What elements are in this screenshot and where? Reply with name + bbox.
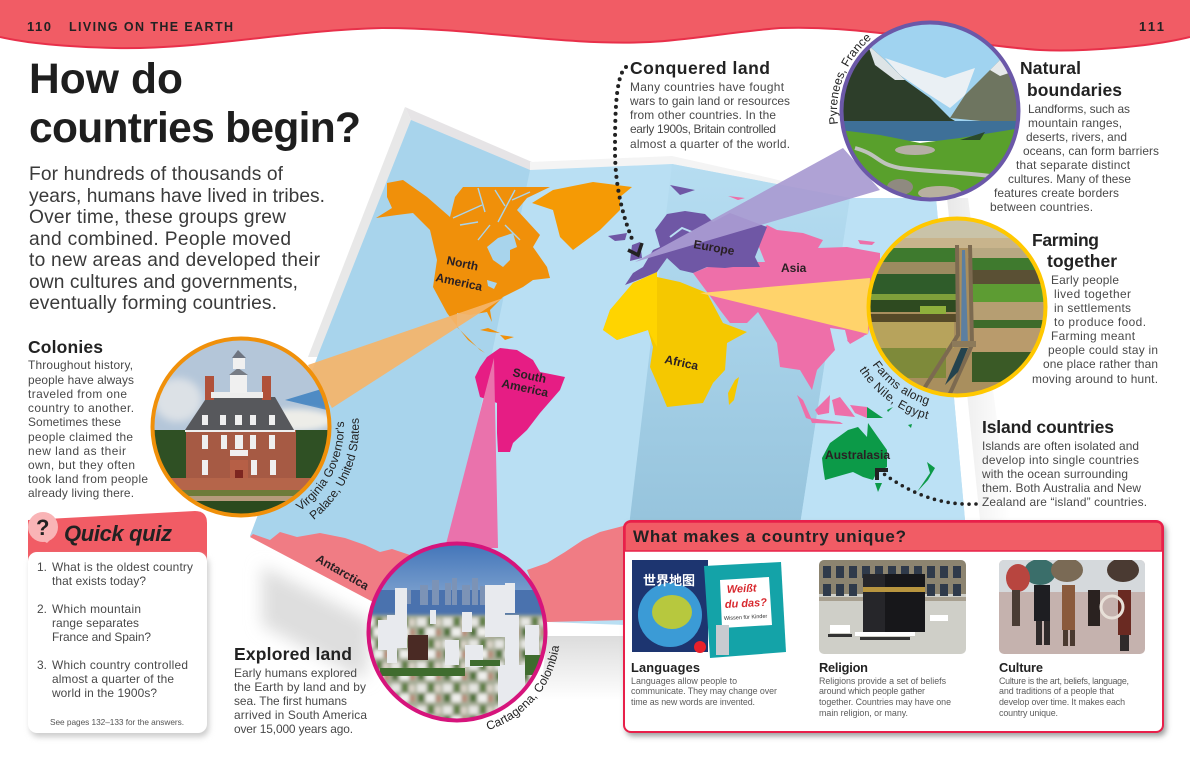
continent labels: Europe	[692, 237, 736, 258]
text block: Farming together: one place rather than	[1043, 357, 1158, 371]
intro text: to new areas and developed their	[29, 250, 321, 271]
world map	[250, 120, 965, 625]
continent labels: Asia	[781, 261, 807, 275]
intro text: eventually forming countries.	[29, 293, 277, 314]
header band	[0, 0, 1190, 50]
continent labels: South	[511, 365, 548, 386]
text block: Island countries: them. Both Australia and New	[982, 481, 1141, 495]
text block: Conquered land: wars to gain land or resources	[629, 94, 790, 108]
caption: Virginia Governor's Palace: Virginia Governor's	[295, 422, 344, 509]
image: language books	[632, 560, 786, 658]
text block: Colonies: Sometimes these	[28, 415, 121, 429]
arrow: dotted line to Britain	[615, 67, 642, 255]
continent: Antarctica	[250, 525, 627, 622]
quiz questions: What is the oldest country	[52, 560, 193, 574]
text block: Farming together	[1032, 230, 1158, 386]
beam: South America to Cartagena	[445, 358, 498, 548]
running head: LIVING ON THE EARTH	[69, 20, 233, 34]
text block: Colonies: country to another.	[28, 401, 134, 415]
text: Languages: Languages	[631, 660, 700, 675]
continent labels: America	[500, 376, 550, 400]
text block: Colonies: Throughout history,	[28, 358, 133, 372]
continent: Australasia	[822, 407, 935, 492]
intro text: For hundreds of thousands of	[29, 164, 284, 185]
panel header	[625, 522, 1162, 551]
continent labels	[314, 237, 890, 593]
intro text: and combined. People moved	[29, 229, 291, 250]
text block: Colonies: new land as their	[28, 444, 126, 458]
intro text: own cultures and governments,	[29, 272, 298, 293]
quiz questions: 2.	[37, 602, 47, 616]
continent labels: Australasia	[825, 448, 890, 462]
text block: Natural boundaries: boundaries	[1027, 80, 1122, 100]
text: Culture: develop over time. It makes each	[999, 697, 1125, 707]
text: Religion	[819, 660, 951, 718]
text block: Natural boundaries	[990, 58, 1159, 214]
icon: question bubble: ?	[36, 515, 49, 540]
quiz questions: range separates	[52, 616, 139, 630]
image: traditional dancers	[999, 558, 1145, 654]
text: Culture: country unique.	[999, 708, 1058, 718]
title: How do	[29, 56, 183, 103]
quiz questions: 1.	[37, 560, 47, 574]
continent labels: Africa	[663, 352, 700, 373]
quiz heading: Quick quiz	[64, 521, 172, 546]
continent: North America	[376, 180, 550, 353]
continent: Europe	[608, 185, 767, 285]
text block: Colonies: Colonies	[28, 337, 103, 357]
paper shadows	[262, 107, 1010, 700]
text block: Farming together: Farming meant	[1051, 329, 1136, 343]
page number right: 111	[1139, 19, 1164, 34]
intro text: Over time, these groups grew	[29, 207, 286, 228]
text block: Natural boundaries: mountain ranges,	[1028, 116, 1122, 130]
text block: Natural boundaries: deserts, rivers, and	[1026, 130, 1127, 144]
text block: Island countries: with the ocean surrounding	[981, 467, 1128, 481]
beam: North America to palace	[308, 298, 503, 408]
photo: Cartagena	[366, 542, 548, 722]
caption: Cartagena, Colombia: Cartagena, Colombia	[486, 646, 560, 730]
text block: Colonies: people claimed the	[28, 430, 133, 444]
quiz questions: Which country controlled	[52, 658, 188, 672]
text: Culture: Culture	[999, 660, 1043, 675]
text block: Colonies: own, but they often	[28, 458, 135, 472]
text block: Colonies: traveled from one	[28, 387, 127, 401]
image: Kaaba	[819, 560, 966, 654]
quiz questions: world in the 1900s?	[51, 686, 157, 700]
map paper	[250, 120, 965, 625]
text block: Conquered land: from other countries. In the	[630, 108, 776, 122]
beam: Europe to Pyrenees	[635, 148, 880, 262]
continent labels: Antarctica	[314, 551, 372, 593]
continent labels: North	[445, 253, 480, 274]
quiz questions: 3.	[37, 658, 47, 672]
quiz questions: Which mountain	[52, 602, 141, 616]
text block: Explored land: sea. The first humans	[234, 694, 347, 708]
text: Religion: Religion	[819, 660, 868, 675]
text block: Natural boundaries: features create borders	[994, 186, 1119, 200]
caption: Farms along the Nile, Egypt: Farms along	[872, 360, 930, 406]
quiz red header	[28, 511, 207, 565]
image: language books: 世界地图	[643, 573, 695, 588]
text block: Conquered land: almost a quarter of the world.	[630, 137, 790, 151]
text block: Natural boundaries: Landforms, such as	[1028, 102, 1130, 116]
text block: Explored land: over 15,000 years ago.	[234, 722, 353, 736]
image: language books: Weißt	[727, 582, 758, 596]
image: language books: Wissen für Kinder	[724, 614, 768, 622]
arrow: dotted line to Australia	[877, 470, 976, 504]
text block: Island countries: Island countries	[982, 417, 1114, 437]
text block: Island countries: develop into single countries	[982, 453, 1139, 467]
text: Religion: main religion, or many.	[819, 708, 908, 718]
text block: Colonies: people have always	[28, 373, 134, 387]
quiz answers note: See pages 132–133 for the answers.	[50, 717, 184, 727]
caption: Virginia Governor's Palace: Palace, United States	[309, 418, 359, 520]
panel: Quick quiz	[28, 511, 209, 737]
text block: Island countries: Zealand are “island” countries.	[982, 495, 1147, 509]
text block: Explored land: Explored land	[234, 644, 352, 664]
caption: Farms along the Nile, Egypt: the Nile, Egypt	[860, 366, 929, 420]
text block: Natural boundaries: between countries.	[990, 200, 1093, 214]
continent labels: America	[434, 270, 484, 294]
text: Languages: time as new words are invented.	[631, 697, 755, 707]
text: Religion: Religions provide a set of beliefs	[819, 676, 947, 686]
text block: Farming together: Farming	[1032, 230, 1099, 250]
caption: Pyrenees, France: Pyrenees, France	[829, 35, 870, 124]
title	[29, 56, 361, 152]
text block: Explored land: Early humans explored	[234, 666, 357, 680]
quiz card	[30, 556, 209, 737]
text block: Conquered land: early 1900s, Britain controlled	[630, 122, 776, 136]
continent: South America	[475, 348, 565, 452]
panel heading: What makes a country unique?	[633, 527, 906, 546]
image: language books: du das?	[725, 597, 768, 611]
photo: Virginia Governor's Palace	[150, 336, 340, 521]
text block: Explored land: the Earth by land and by	[234, 680, 366, 694]
text block: Natural boundaries: Natural	[1020, 58, 1081, 78]
quiz questions	[37, 560, 193, 700]
text block: Farming together: in settlements	[1054, 301, 1131, 315]
text block: Farming together: Early people	[1051, 273, 1119, 287]
text block: Explored land: arrived in South America	[234, 708, 367, 722]
quiz questions: France and Spain?	[52, 630, 151, 644]
text block: Conquered land: Many countries have fought	[630, 80, 785, 94]
quiz questions: almost a quarter of the	[52, 672, 174, 686]
text block: Farming together: together	[1047, 251, 1117, 271]
text block: Colonies: took land from people	[28, 472, 148, 486]
text block: Farming together: moving around to hunt.	[1032, 372, 1158, 386]
icon: question bubble	[28, 512, 58, 543]
text: Languages: communicate. They may change over	[631, 686, 777, 696]
text block: Farming together: to produce food.	[1054, 315, 1146, 329]
text: Religion: around which people gather	[819, 686, 925, 696]
beam: Africa to Nile farms	[700, 278, 870, 334]
quiz questions: that exists today?	[52, 574, 146, 588]
text block: Island countries: Islands are often isolated and	[982, 439, 1139, 453]
text block: Conquered land: Conquered land	[630, 58, 770, 78]
text: Culture	[999, 660, 1129, 718]
text block: Colonies: already living there.	[28, 486, 134, 500]
text: Languages: Languages allow people to	[631, 676, 737, 686]
text block: Conquered land	[629, 58, 790, 151]
text: Culture: and traditions of a people that	[999, 686, 1115, 696]
photo: Pyrenees	[840, 20, 1022, 205]
continent: Asia	[693, 196, 880, 424]
page number left: 110	[27, 19, 51, 34]
continent: Africa	[603, 272, 747, 407]
text: Languages	[631, 660, 777, 707]
continent: Greenland	[532, 182, 632, 250]
text block: Explored land	[234, 644, 367, 736]
title: countries begin?	[29, 105, 361, 152]
intro text	[29, 164, 325, 314]
text block: Island countries	[981, 417, 1147, 509]
text block: Natural boundaries: that separate distinct	[1016, 158, 1131, 172]
text: Religion: together. Countries may have one	[819, 697, 951, 707]
text block: Farming together: lived together	[1054, 287, 1131, 301]
text block: Natural boundaries: oceans, can form barriers	[1023, 144, 1159, 158]
text block: Colonies	[28, 337, 148, 500]
intro text: years, humans have lived in tribes.	[29, 186, 325, 207]
text block: Farming together: people could stay in	[1048, 343, 1158, 357]
text: Culture: Culture is the art, beliefs, language,	[999, 676, 1129, 686]
text block: Natural boundaries: cultures. Many of these	[1008, 172, 1131, 186]
panel: What makes a country unique?	[624, 521, 1166, 736]
photo: Nile farms	[866, 216, 1050, 400]
